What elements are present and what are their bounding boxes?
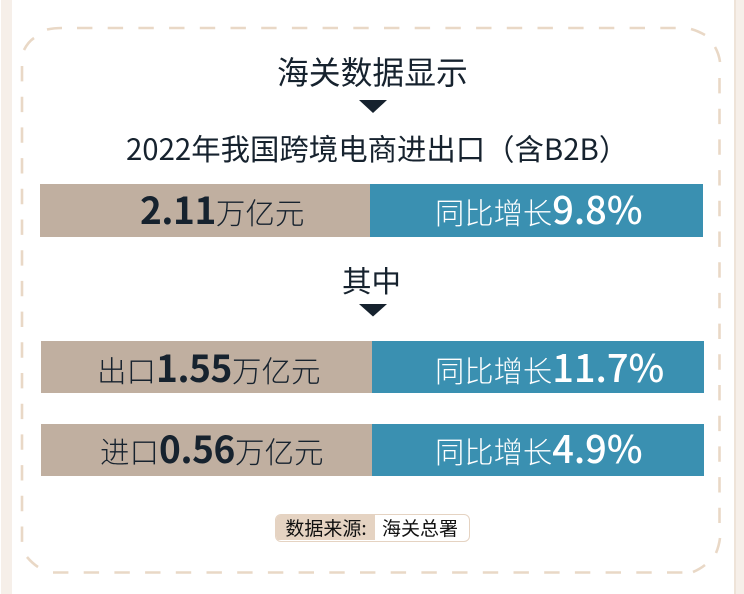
source label: 数据来源: — [285, 514, 367, 541]
left edge strip — [1, 0, 12, 594]
arrow: down triangle 2 — [359, 304, 387, 316]
exports growth — [372, 341, 704, 393]
imports growth: 同比增长4.9% — [435, 418, 643, 474]
row: total — [40, 180, 703, 237]
exports value: 出口1.55万亿元 — [97, 339, 320, 393]
subheading: 2022 cross-border e-commerce: 2022年我国跨境电商进出口（含B2B） — [126, 127, 628, 169]
source badge — [275, 514, 470, 542]
total value — [40, 184, 370, 237]
right edge strip — [734, 0, 744, 594]
imports value — [41, 424, 372, 476]
arrow: down triangle 1 — [359, 100, 387, 113]
source value: 海关总署 — [382, 514, 458, 541]
row: exports — [41, 338, 704, 393]
exports value — [41, 341, 372, 393]
imports growth — [372, 424, 704, 476]
total value: 2.11万亿元 — [140, 180, 304, 234]
row: imports — [41, 418, 704, 476]
total growth: 同比增长9.8% — [435, 180, 643, 235]
heading: of which: 其中 — [342, 259, 401, 301]
exports growth: 同比增长11.7% — [435, 338, 664, 392]
imports value: 进口0.56万亿元 — [100, 420, 323, 474]
heading: customs data: 海关数据显示 — [277, 48, 468, 94]
total growth — [370, 184, 703, 237]
